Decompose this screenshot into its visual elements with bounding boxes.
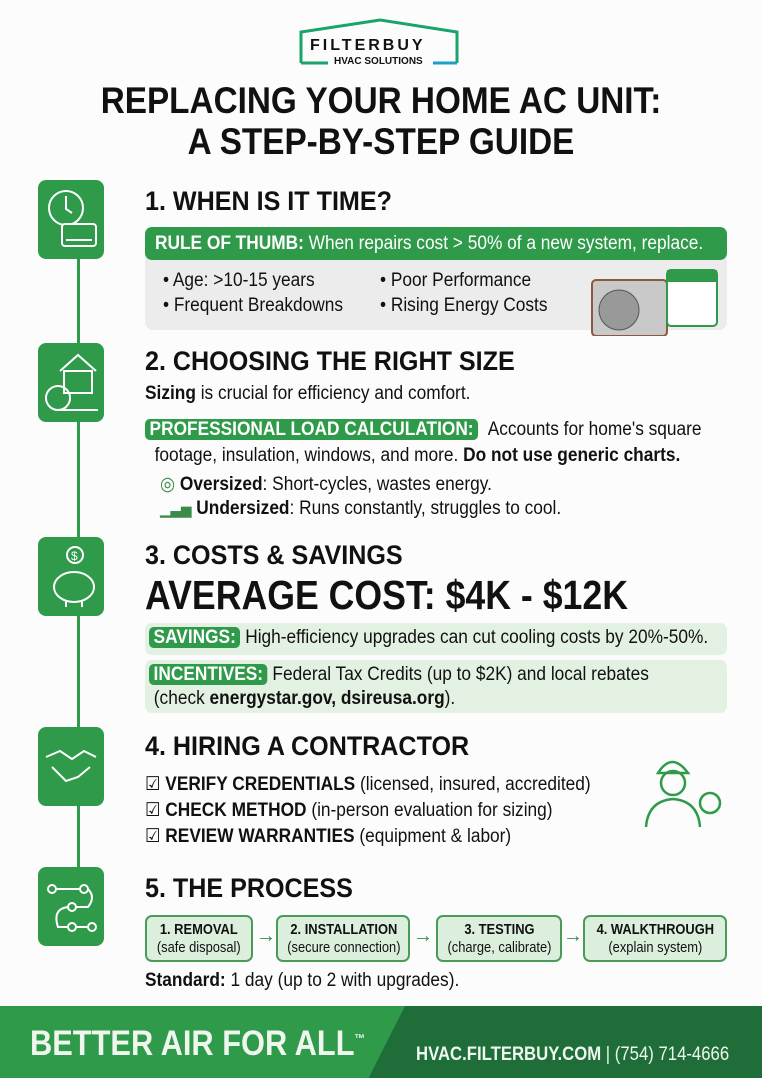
incentives: INCENTIVES: Federal Tax Credits (up to $2K) and local rebates	[154, 664, 649, 685]
footer: HVAC.FILTERBUY.COM | (754) 714-4666	[416, 1044, 729, 1065]
process steps: →	[563, 925, 583, 947]
process steps: (charge, calibrate)	[447, 939, 551, 956]
process steps: 4. WALKTHROUGH	[596, 921, 714, 938]
average cost: AVERAGE COST: $4K - $12K	[145, 572, 628, 618]
process steps: (secure connection)	[287, 939, 401, 956]
icon: house and tape	[38, 343, 104, 422]
heading 1: 1. WHEN IS IT TIME?	[145, 186, 392, 216]
load calculation	[145, 419, 702, 466]
checklist	[145, 774, 591, 847]
icon: contractor	[644, 760, 722, 828]
undersized: ▁▃▅ Undersized: Runs constantly, struggles to cool.	[160, 498, 561, 519]
load calculation: footage, insulation, windows, and more. Do not use generic charts.	[155, 445, 680, 466]
process steps	[145, 915, 727, 962]
process steps: 1. REMOVAL	[160, 921, 238, 938]
process steps: →	[413, 925, 433, 947]
heading 3: 3. COSTS & SAVINGS	[145, 540, 403, 570]
footer: BETTER AIR FOR ALL™	[30, 1024, 365, 1063]
title	[101, 80, 661, 162]
icon: piggy bank	[38, 537, 104, 616]
title: A STEP-BY-STEP GUIDE	[188, 121, 574, 162]
icon: ac unit and calendar	[591, 269, 718, 336]
process steps: (explain system)	[608, 939, 702, 956]
incentives	[145, 660, 727, 713]
timeline line	[77, 258, 80, 878]
savings	[145, 623, 727, 655]
checklist: ☑ REVIEW WARRANTIES (equipment & labor)	[145, 826, 511, 847]
icon: clock	[38, 180, 104, 259]
icon: piggy bank: $	[71, 549, 78, 563]
heading 4: 4. HIRING A CONTRACTOR	[145, 731, 469, 761]
rule of thumb bar: RULE OF THUMB: When repairs cost > 50% of a new system, replace.	[155, 233, 703, 254]
footer	[0, 1006, 762, 1078]
heading 2: 2. CHOOSING THE RIGHT SIZE	[145, 346, 515, 376]
signs box: • Poor Performance	[380, 270, 531, 291]
incentives: (check energystar.gov, dsireusa.org).	[154, 688, 455, 709]
signs box: • Frequent Breakdowns	[163, 295, 343, 316]
signs box: • Rising Energy Costs	[380, 295, 547, 316]
process steps: 2. INSTALLATION	[290, 921, 397, 938]
heading 5: 5. THE PROCESS	[145, 873, 353, 903]
title: REPLACING YOUR HOME AC UNIT:	[101, 80, 661, 121]
load calculation: PROFESSIONAL LOAD CALCULATION: Accounts for home's square	[150, 419, 702, 440]
process steps: (safe disposal)	[157, 939, 241, 956]
logo: HVAC SOLUTIONS	[334, 56, 423, 67]
icon: process flow	[38, 867, 104, 946]
oversized: ◎ Oversized: Short-cycles, wastes energy.	[160, 474, 492, 495]
rule of thumb bar	[145, 227, 727, 260]
checklist: ☑ CHECK METHOD (in-person evaluation for sizing)	[145, 800, 553, 821]
logo	[300, 18, 458, 67]
savings: SAVINGS: High-efficiency upgrades can cut cooling costs by 20%-50%.	[154, 627, 708, 648]
signs box	[145, 250, 727, 330]
sizing text: Sizing is crucial for efficiency and comfort.	[145, 383, 470, 404]
standard text: Standard: 1 day (up to 2 with upgrades).	[145, 970, 459, 991]
signs box: • Age: >10-15 years	[163, 270, 315, 291]
checklist: ☑ VERIFY CREDENTIALS (licensed, insured, accredited)	[145, 774, 591, 795]
process steps: 3. TESTING	[464, 921, 534, 938]
logo: FILTERBUY	[310, 37, 426, 54]
process steps: →	[256, 925, 276, 947]
icon: handshake	[38, 727, 104, 806]
